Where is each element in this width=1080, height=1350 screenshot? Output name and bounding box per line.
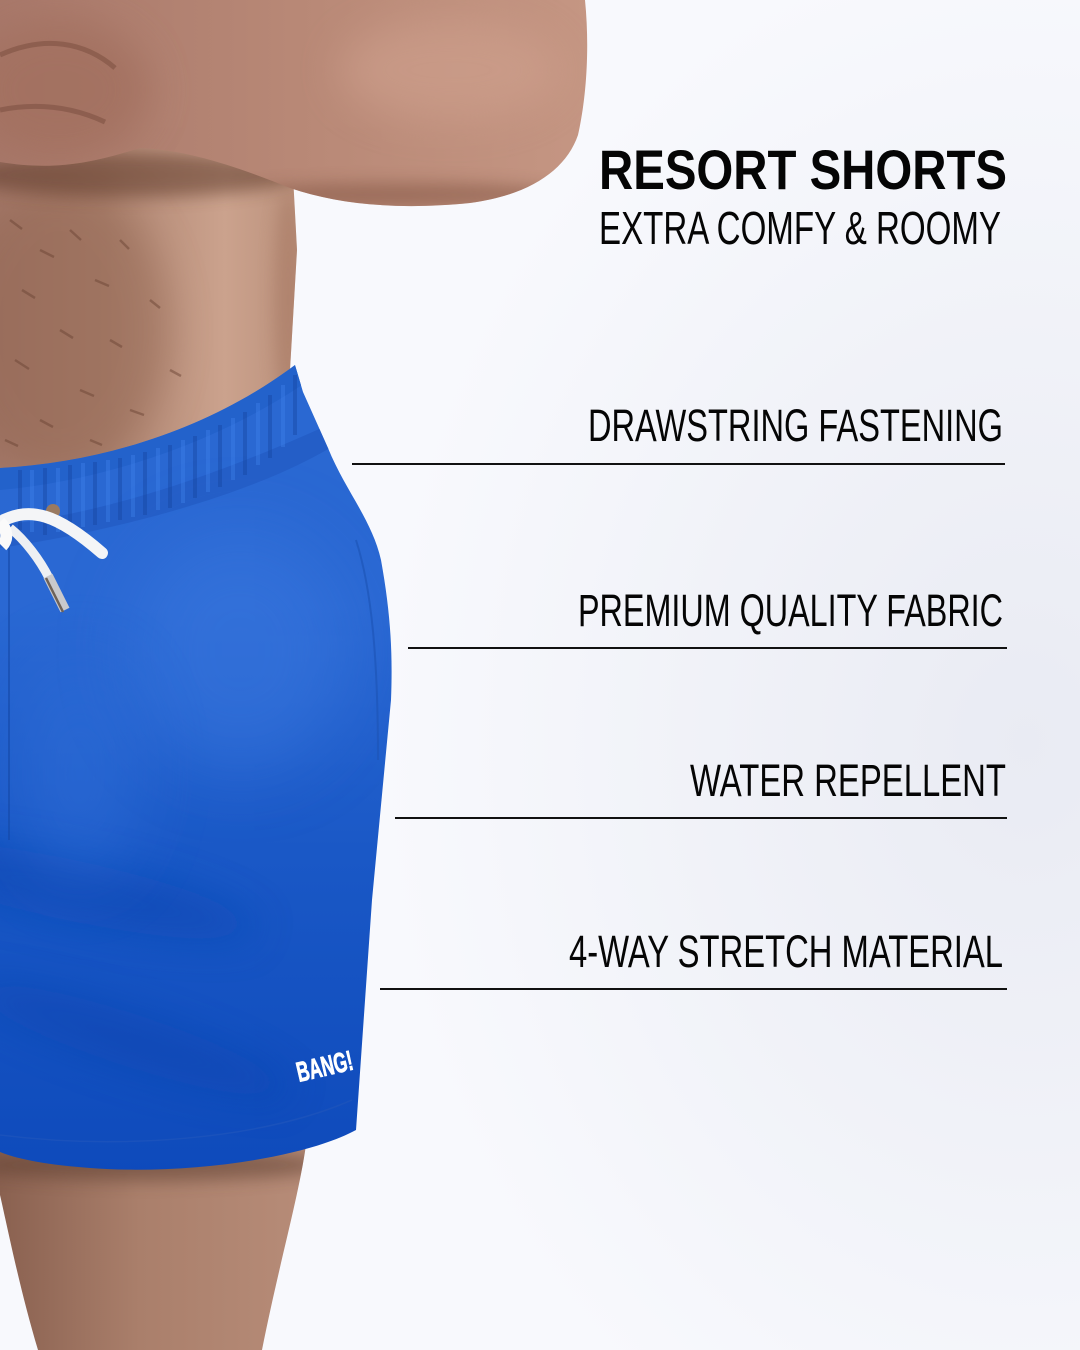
torso with chest hair — [0, 148, 297, 468]
blue shorts — [0, 360, 400, 1180]
heading: Resort Shorts: RESORT SHORTS — [599, 138, 1007, 201]
drawstring — [0, 504, 102, 612]
brand logo on shorts: BANG! — [293, 1045, 356, 1088]
forearm and hand — [0, 0, 590, 210]
leg — [0, 1149, 306, 1350]
model photo: torso, arm, shorts and leg — [0, 0, 590, 1350]
